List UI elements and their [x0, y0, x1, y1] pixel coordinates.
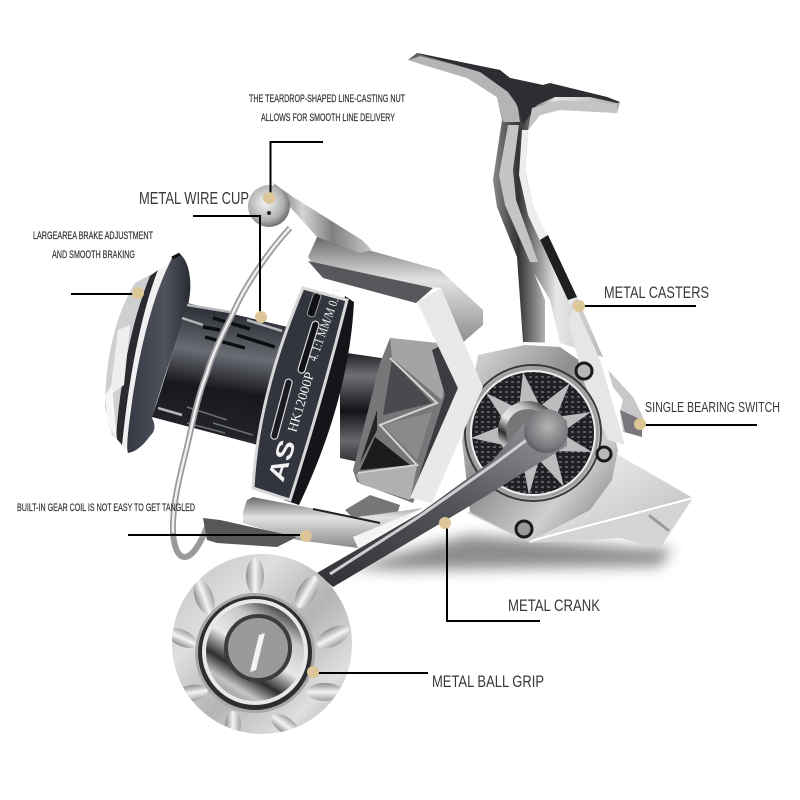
callout: brake adjustment: LARGEAREA BRAKE ADJUSTMENT	[33, 230, 153, 242]
cap	[105, 268, 163, 447]
spool rim with model text: 4. 1:1 MM/M 0.33	[305, 286, 345, 363]
spool rim with model text: AS	[263, 437, 302, 485]
dark flange	[127, 254, 190, 453]
label: metal ball grip: METAL BALL GRIP	[432, 673, 544, 691]
stem window	[534, 273, 560, 343]
callout: brake adjustment	[33, 230, 153, 261]
ball grip knob	[164, 554, 353, 741]
marker dots	[132, 192, 646, 678]
callout: brake adjustment: AND SMOOTH BRAKING	[52, 249, 135, 261]
callout: teardrop nut	[249, 93, 405, 124]
callout: teardrop nut: ALLOWS FOR SMOOTH LINE DELIVERY	[261, 112, 395, 124]
upper bail arm	[273, 183, 372, 253]
bail arm: inner dark	[308, 261, 433, 303]
crank hub	[524, 409, 568, 453]
knob ribs	[172, 558, 350, 732]
frame stem with top bar	[408, 53, 620, 357]
spool body	[152, 303, 292, 445]
star spokes	[471, 372, 592, 495]
hexagonal bail arm: upper band	[308, 237, 483, 345]
single bearing switch	[608, 370, 643, 437]
spool flange and cap	[105, 254, 190, 453]
line roller ball	[248, 185, 290, 227]
body arm	[568, 305, 625, 445]
ground shadow	[345, 535, 672, 570]
spool rim with model text: HK12000P	[285, 370, 317, 434]
screws	[516, 363, 611, 537]
leader lines	[71, 142, 757, 673]
gear housing plate	[462, 345, 618, 542]
label: metal crank: METAL CRANK	[508, 597, 600, 615]
rotor cup	[353, 338, 460, 503]
rear skirt	[467, 452, 693, 548]
label: metal wire cup: METAL WIRE CUP	[139, 188, 249, 208]
spool rim with model text	[253, 286, 354, 505]
callout: teardrop nut: THE TEARDROP-SHAPED LINE-CASTING NUT	[249, 93, 405, 105]
callout: gear coil: BUILT-IN GEAR COIL IS NOT EASY TO GET TANGLED	[17, 502, 195, 514]
bail foot plate	[203, 495, 423, 548]
reel illustration	[105, 53, 693, 741]
spool neck	[340, 352, 395, 470]
bail wire	[173, 228, 290, 557]
gear wheel	[465, 365, 601, 501]
crank arm	[317, 413, 567, 587]
label: metal casters: METAL CASTERS	[604, 283, 709, 302]
crank highlight	[330, 433, 536, 574]
bail arm: white band	[410, 288, 483, 503]
